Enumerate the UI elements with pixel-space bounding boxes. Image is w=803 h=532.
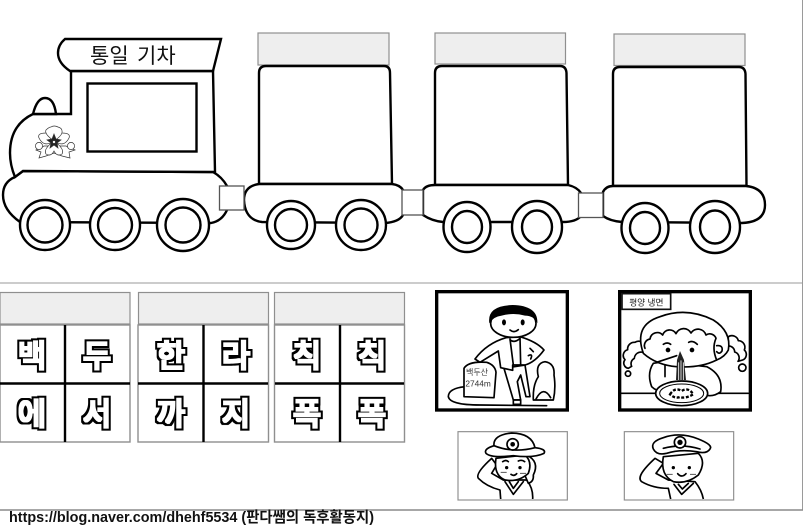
block letters: 까 [157,389,185,434]
stone label [465,367,491,389]
block letters: 지 [222,389,250,434]
picture: girl train conductor [458,432,567,500]
eyes and ear [663,342,722,353]
title: 통일 기차: 통일 [90,40,129,70]
face [502,319,525,332]
cap [653,435,711,454]
word card set: 백두에서 [0,292,130,442]
car body [435,66,568,185]
picture: boy train conductor [624,432,734,500]
block letters: 한 [157,331,185,376]
title: 통일 기차: 기차 [137,40,176,70]
car chassis [244,184,403,223]
face [663,453,702,482]
head [491,309,536,337]
hair [489,305,537,323]
block letters [157,331,250,434]
train car 2 [423,33,581,253]
coupler [578,193,603,218]
table edge [620,391,748,396]
right braid [728,336,746,361]
footer source text: https://blog.naver.com/dhehf5534 (판다쌤의 독후활동지) [9,509,374,526]
answer label box [258,33,389,65]
legs [504,365,530,400]
steam dome [33,98,56,114]
block letters [293,331,386,434]
label box [622,294,671,309]
hair and face [641,312,729,367]
header box [138,292,268,324]
car wheels [622,201,740,253]
car wheels [444,201,562,253]
locomotive wheels [20,199,209,251]
block letters: 라 [222,331,250,376]
block letters: 폭 [293,389,321,434]
car body [613,67,746,186]
card grid [0,325,130,442]
noodles and chopsticks [657,351,686,380]
answer label box [614,34,745,66]
title sign [58,39,221,71]
block letters: 백 [18,331,46,376]
locomotive cab and boiler [10,71,215,177]
locomotive chassis [3,171,227,223]
block letters [18,331,111,434]
stone label: 2744m [465,379,491,389]
block letters: 폭 [358,389,386,434]
uniform and arm [478,458,533,499]
header box [274,292,404,324]
stone label: 백두산 [466,367,489,377]
block letters: 칙 [358,331,386,376]
block letters: 두 [83,331,111,376]
uniform and arm [640,458,703,499]
card grid [138,325,268,442]
car chassis [423,185,581,222]
block letters: 서 [83,389,111,434]
hair bun [523,455,536,483]
label: 평양 냉면: 평양 냉면 [629,296,664,308]
car wheels [267,200,386,250]
ground shadow [448,387,547,406]
picture: boy at Baekdu mountain [437,292,567,410]
train car 1 [244,33,403,250]
collar [674,483,693,494]
car chassis [603,186,765,223]
card grid [274,325,404,442]
header box [0,292,130,324]
arms and body [650,362,721,396]
word card set: 한라까지 [138,292,268,442]
icon: mugunghwa flower emblem [35,126,75,158]
cab window [88,84,196,152]
picture: girl eating Pyongyang naengmyeon [620,292,750,410]
cap [485,433,544,457]
boy body [475,337,544,370]
face [496,455,530,480]
car body [259,66,392,184]
curly bangs [644,329,717,360]
answer label box [435,33,566,64]
block letters: 칙 [293,331,321,376]
word card set: 칙칙폭폭 [274,292,404,442]
summit stone [464,362,496,398]
pocket badge [528,348,533,359]
block letters: 에 [18,389,46,434]
collar [505,482,523,494]
backpack [533,362,555,400]
bowl of noodles [656,381,708,406]
coupler [220,186,244,210]
coupler [402,190,423,215]
train locomotive [3,39,227,251]
left braid [623,341,646,368]
train car 3 [603,34,765,253]
